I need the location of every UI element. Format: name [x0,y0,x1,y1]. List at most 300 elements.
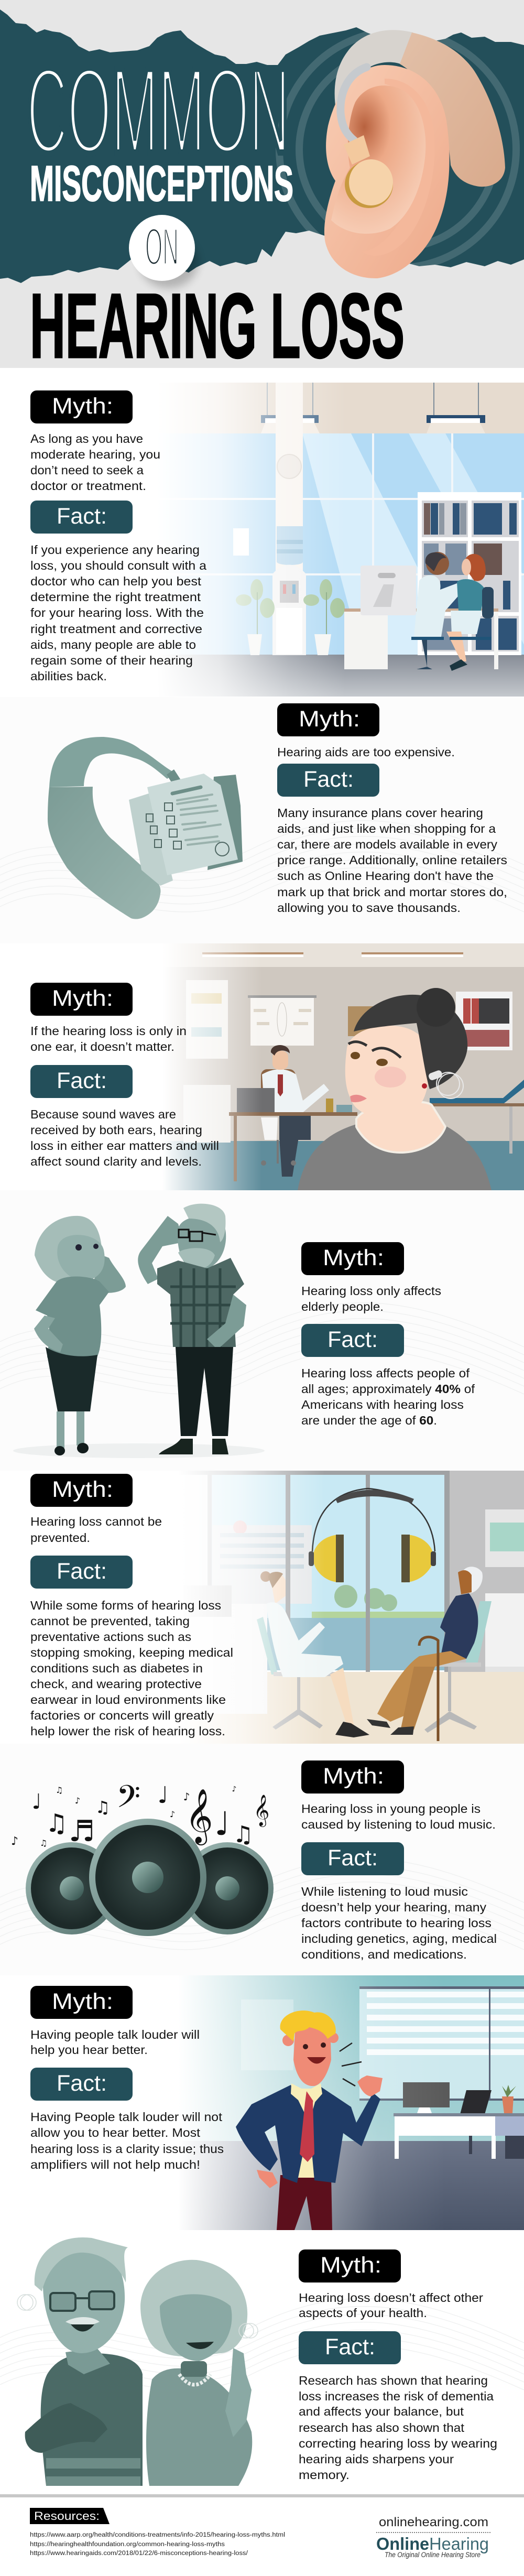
resource links: https://hearinghealthfoundation.org/common-hearing-loss-myths [30,2541,225,2548]
fact text: all ages; approximately 40% of [301,1382,475,1396]
wall clock [277,454,301,479]
illustration: elderly woman [34,1216,126,1455]
document back folder [208,775,243,870]
music notes: ♫ [45,1809,68,1838]
hair bun [417,988,455,1027]
connector [344,135,370,165]
sweater stripes [46,2458,140,2486]
office chair [460,2090,492,2114]
jacket left [236,2085,309,2183]
music notes: ♪ [75,1796,80,1806]
myth label: Myth: [323,1764,384,1789]
fact label: Fact: [325,2334,375,2360]
ground shadow [13,1443,265,1458]
shoes [54,1443,89,1455]
head [178,1216,226,1271]
fact text: Hearing loss affects people of [301,1366,470,1380]
ear aid [436,1072,463,1099]
checklist page [147,774,238,875]
fact text: and affects your balance, but [299,2405,464,2418]
fact text: hearing aids sharpens your [299,2452,454,2466]
right ear cup [401,1535,434,1582]
fact label [30,1065,133,1098]
doctor woman [260,1571,369,1737]
fact label [301,1324,404,1357]
fact text: allow you to hear better. Most [30,2126,200,2139]
resources tag: Resources: [34,2509,100,2523]
laptop [237,1088,275,1112]
medicine cabinet [183,980,231,1143]
panel: myth 1 [0,383,524,697]
dark floor [157,2141,524,2230]
icon: ear with hearing aid [324,30,505,278]
woman hearing aid [239,2323,258,2338]
wall cabinet [485,1509,524,1682]
brand logo: onlinehearing.com [379,2515,488,2529]
myth label [299,2249,401,2282]
fact label: Fact: [303,767,354,792]
music notes [11,1778,269,1849]
man body [41,2353,143,2486]
footer [0,2494,524,2559]
header panel [0,0,524,377]
ceiling [105,383,524,433]
myth text: one ear, it doesn’t matter. [30,1040,174,1053]
left wall [157,1471,210,1680]
doctor [411,552,465,669]
fact text: cannot be prevented, taking [30,1614,190,1628]
water cooler [272,526,306,655]
desk [394,2113,524,2159]
myth text [30,2028,200,2057]
myth label [30,1986,133,2019]
skirt [46,1347,97,1411]
myth text [301,1802,496,1831]
fact text: While listening to loud music [301,1885,468,1898]
myth text [299,2291,483,2320]
myth text: don’t need to seek a [30,463,144,477]
fact text: right treatment and corrective [30,622,202,636]
myth label: Myth: [320,2253,381,2278]
raised arm [86,1255,126,1293]
monitor [403,2082,450,2113]
hearing aid clear section [335,30,413,137]
background waves [0,2299,524,2390]
myth text: Having people talk louder will [30,2028,200,2041]
brand logo: The Original Online Hearing Store [385,2551,481,2559]
myth label: Myth: [52,1477,113,1502]
woman hair [140,2260,247,2356]
myth text [30,1515,162,1545]
man glasses [50,2291,114,2311]
fact text: While some forms of hearing loss [30,1599,221,1612]
window mullions [105,433,524,656]
speech lines [340,2043,362,2086]
on badge [129,215,195,281]
ceiling lights [202,952,463,957]
man hearing aid [17,2295,36,2310]
patient [446,554,494,671]
fact label: Fact: [57,2071,107,2096]
hearing aid tube [341,67,367,140]
framed certificate [348,1006,374,1036]
window frames [157,1471,450,1680]
pill bottle and books [326,1099,352,1112]
myth label: Myth: [299,707,360,732]
fact label: Fact: [328,1327,378,1352]
myth text: As long as you have [30,432,143,445]
fact text: research has also shown that [299,2421,464,2434]
inner ear [331,85,425,234]
potted plant [502,2085,516,2113]
music notes: ♪ [11,1835,18,1848]
man arms [25,2403,107,2453]
music notes: ♫ [56,1785,63,1795]
ceiling lamps [261,383,485,433]
raised arm [138,1216,183,1284]
panel: myth 2 [0,697,524,943]
sound rings [279,31,516,268]
desk at left [178,1604,267,1714]
hair [35,1216,102,1284]
lips [350,1095,367,1102]
music notes: ♫ [233,1821,254,1848]
fact text: are under the age of 60. [301,1414,437,1427]
illustration: elderly man [138,1204,246,1454]
computer monitor [361,566,416,615]
title: misconceptions: MISCONCEPTIONS [30,156,293,212]
beard [178,1248,215,1269]
hearing aid hook [49,737,176,787]
myth label [30,983,133,1016]
fade overlay [0,1471,524,1744]
light switch panel [233,528,249,556]
chair left [257,1617,344,1730]
left speaker [26,1842,118,1934]
face [345,1026,429,1118]
myth text: If the hearing loss is only in [30,1024,187,1038]
protective headphones [309,1488,436,1582]
myth text: Hearing loss cannot be [30,1515,162,1528]
cheek blush [375,1067,406,1088]
sweater [298,1124,492,1190]
bookshelf [418,492,521,655]
patient man [367,1567,483,1735]
neck and chest [356,1102,445,1153]
myth text: prevented. [30,1531,90,1545]
anatomy poster [248,995,316,1046]
fact text: doctor who can help you best [30,574,201,588]
fact text: such as Online Hearing don't have the [277,869,494,883]
waiting room illustration [0,1471,524,1744]
desk monitor [183,1585,232,1617]
fact text [299,2374,497,2482]
resource links: https://www.aarp.org/health/conditions-treatments/info-2015/hearing-loss-myths.html [30,2532,285,2538]
back page [129,792,173,886]
section background [0,1744,524,1975]
fact text: memory. [299,2468,350,2482]
myth text: doctor or treatment. [30,479,146,493]
fact label [277,764,379,797]
glasses [179,1230,216,1241]
plants [236,579,345,655]
legs [57,1411,84,1448]
woman necklace [179,2374,211,2385]
fade overlay [0,943,524,1190]
myth label: Myth: [52,986,113,1011]
ear dome [349,159,393,205]
fact text: If you experience any hearing [30,543,200,557]
fact text: mark up that brick and mortar stores do, [277,885,507,899]
pants [176,1347,233,1436]
fact label: Fact: [328,1845,378,1871]
illustration: speakers [26,1819,274,1936]
outer ear [324,65,450,278]
fact text: doesn’t help your hearing, many [301,1900,486,1914]
hair [354,995,467,1089]
hair [280,2010,336,2041]
woman body [146,2368,252,2486]
music notes: ♪ [232,1785,236,1794]
torn teal band [0,9,524,283]
shirt [291,2089,328,2178]
woman hand [225,2348,252,2437]
panel: myth 5 [0,1471,524,1744]
icon: hearing aid with checklist [48,737,243,919]
music notes: ♬ [69,1814,95,1849]
floor [157,1141,524,1190]
fact text: help lower the risk of hearing loss. [30,1724,225,1738]
man moustache and smile [66,2317,100,2331]
panel: myth 3 [0,943,524,1190]
fact text: received by both ears, hearing [30,1123,202,1137]
myth text: elderly people. [301,1300,384,1313]
woman with hearing aid [298,988,492,1190]
talking man [236,2010,383,2230]
fact label: Fact: [57,1559,107,1584]
desk [229,1112,357,1181]
lower hand [257,2170,278,2188]
window with blinds [359,1986,524,2101]
fact text: preventative actions such as [30,1630,191,1644]
fact text: aids, and just like when shopping for a [277,822,496,835]
fact text [30,543,207,683]
resource links [30,2532,285,2557]
right wall [450,1471,524,1680]
fact text: conditions such as diabetes in [30,1661,203,1675]
fact label [30,501,133,534]
column [276,383,303,655]
fact text: including genetics, aging, medical [301,1932,497,1945]
fact text: price range. Additionally, online retailers [277,853,507,867]
myth label: Myth: [52,1989,113,2014]
myth text [30,432,160,493]
trousers [277,2175,332,2230]
wall [157,967,524,1141]
window sky [208,1475,450,1632]
myth text: Hearing loss in young people is [301,1802,481,1816]
myth label: Myth: [323,1245,384,1270]
chair right [418,1601,492,1733]
myth text: help you hear better. [30,2043,148,2057]
window [105,433,524,656]
fact text: Research has shown that hearing [299,2374,488,2387]
fact label [30,1556,133,1589]
hearing aid body [400,32,505,187]
myth text [30,1024,187,1053]
fact text [30,2110,224,2171]
fact text: loss increases the risk of dementia [299,2389,494,2403]
fact text: allowing you to save thousands. [277,901,461,915]
fact text: factories or concerts will greatly [30,1709,214,1722]
fact text: conditions, and medications. [301,1948,467,1961]
music notes: ♩ [214,1805,230,1843]
music notes: 𝄞 [254,1795,269,1827]
section background [0,697,524,943]
header grey background [0,0,524,368]
fade overlay [0,383,524,697]
fact text: Having People talk louder will not [30,2110,222,2124]
fact text: affect sound clarity and levels. [30,1155,202,1168]
background waves [0,821,524,912]
desk [344,608,498,669]
ear dome ring [345,161,393,208]
exam bed [430,1080,524,1154]
music notes: ♪ [170,1809,175,1819]
jacket right [309,2086,380,2183]
woman turtleneck [181,2361,207,2377]
woman smile [186,2342,214,2349]
myth text: moderate hearing, you [30,448,160,461]
centre speaker [89,1819,206,1936]
window light beams [302,433,461,655]
fact text [301,1366,475,1427]
tie [300,2091,314,2162]
fact text: hearing loss is a clarity issue; thus [30,2142,224,2156]
fact label [301,1842,404,1875]
neck and face [293,2023,331,2086]
trees [312,1585,450,1618]
music notes: 𝄢 [116,1778,140,1822]
wall poster [241,1999,293,2070]
fact text: amplifiers will not help much! [30,2158,200,2171]
myth label [301,1760,404,1794]
fact label: Fact: [57,1068,107,1093]
panel: myth 7 [0,1975,524,2230]
fact text [301,1885,497,1961]
fact text [277,806,507,915]
music notes: ♫ [95,1797,110,1817]
brand logo: OnlineHearing [376,2534,489,2553]
myth label [30,1474,133,1507]
man hair [35,2237,128,2291]
collar [291,2083,307,2103]
fact text: stopping smoking, keeping medical [30,1646,233,1659]
binder shelf [456,992,512,1050]
panel: myth 6 [0,1744,524,1975]
myth text: Hearing loss doesn’t affect other [299,2291,483,2305]
illustration: older couple [17,2237,258,2486]
myth text: Hearing aids are too expensive. [277,745,455,759]
fact text: correcting hearing loss by wearing [299,2437,497,2450]
fact text: abilities back. [30,669,107,683]
eyes and mouth [303,2042,326,2064]
walking cane [419,1637,438,1741]
fact text: factors contribute to hearing loss [301,1916,492,1930]
fact text: determine the right treatment [30,590,201,604]
clinic illustration [0,943,524,1190]
music notes: ♪ [183,1790,190,1803]
music notes: ♩ [32,1790,41,1814]
fade overlay [0,1975,524,2230]
fact text [30,1107,219,1168]
brand logo [376,2515,492,2559]
eyes [75,1244,99,1251]
floor [105,655,524,697]
ears [282,2032,339,2046]
teal wall [157,1975,524,2141]
fact text: Because sound waves are [30,1107,176,1121]
headband [312,1488,435,1551]
hair [183,1204,226,1242]
ear fold [362,79,434,256]
fact label: Fact: [57,504,107,529]
wooden floor [157,1672,524,1744]
raised hand [357,2075,383,2096]
on badge shadow [139,236,198,288]
fact text: regain some of their hearing [30,654,193,667]
music notes: ♫ [40,1838,47,1848]
man head [43,2245,125,2353]
fact text: Many insurance plans cover hearing [277,806,483,820]
arm and hand [34,1316,63,1352]
plaid shirt [157,1258,244,1347]
fact text: aids, many people are able to [30,638,196,651]
left ear cup [313,1535,344,1582]
background waves [0,1858,524,1950]
resources tag [30,2508,110,2524]
myth text: Hearing loss only affects [301,1284,441,1298]
myth label [301,1242,404,1275]
music notes: 𝄞 [185,1788,213,1845]
fact text: loss, you should consult with a [30,559,207,572]
footer divider [0,2494,524,2497]
resource links: https://www.hearingaids.com/2018/01/22/6-misconceptions-hearing-loss/ [30,2550,248,2557]
hospital building [212,1520,312,1604]
hook clip [167,769,181,785]
fact text: car, there are models available in every [277,838,497,851]
fact label [30,2068,133,2101]
man collar [66,2348,110,2374]
checkboxes [146,803,229,856]
top [36,1277,109,1357]
panel: myth 8 [0,2237,524,2486]
panel: myth 4 [0,1190,524,1471]
background waves [0,1303,524,1394]
section background [0,1190,524,1471]
office illustration [0,1975,524,2230]
right speaker [181,1842,274,1934]
music notes: ♩ [158,1782,168,1809]
forearm [207,1295,246,1350]
office illustration [0,383,524,697]
myth text [301,1284,441,1313]
myth label: Myth: [52,394,113,419]
fact text [30,1599,233,1738]
page lines [172,787,221,845]
shoes [159,1439,228,1454]
fact text: Americans with hearing loss [301,1398,464,1411]
